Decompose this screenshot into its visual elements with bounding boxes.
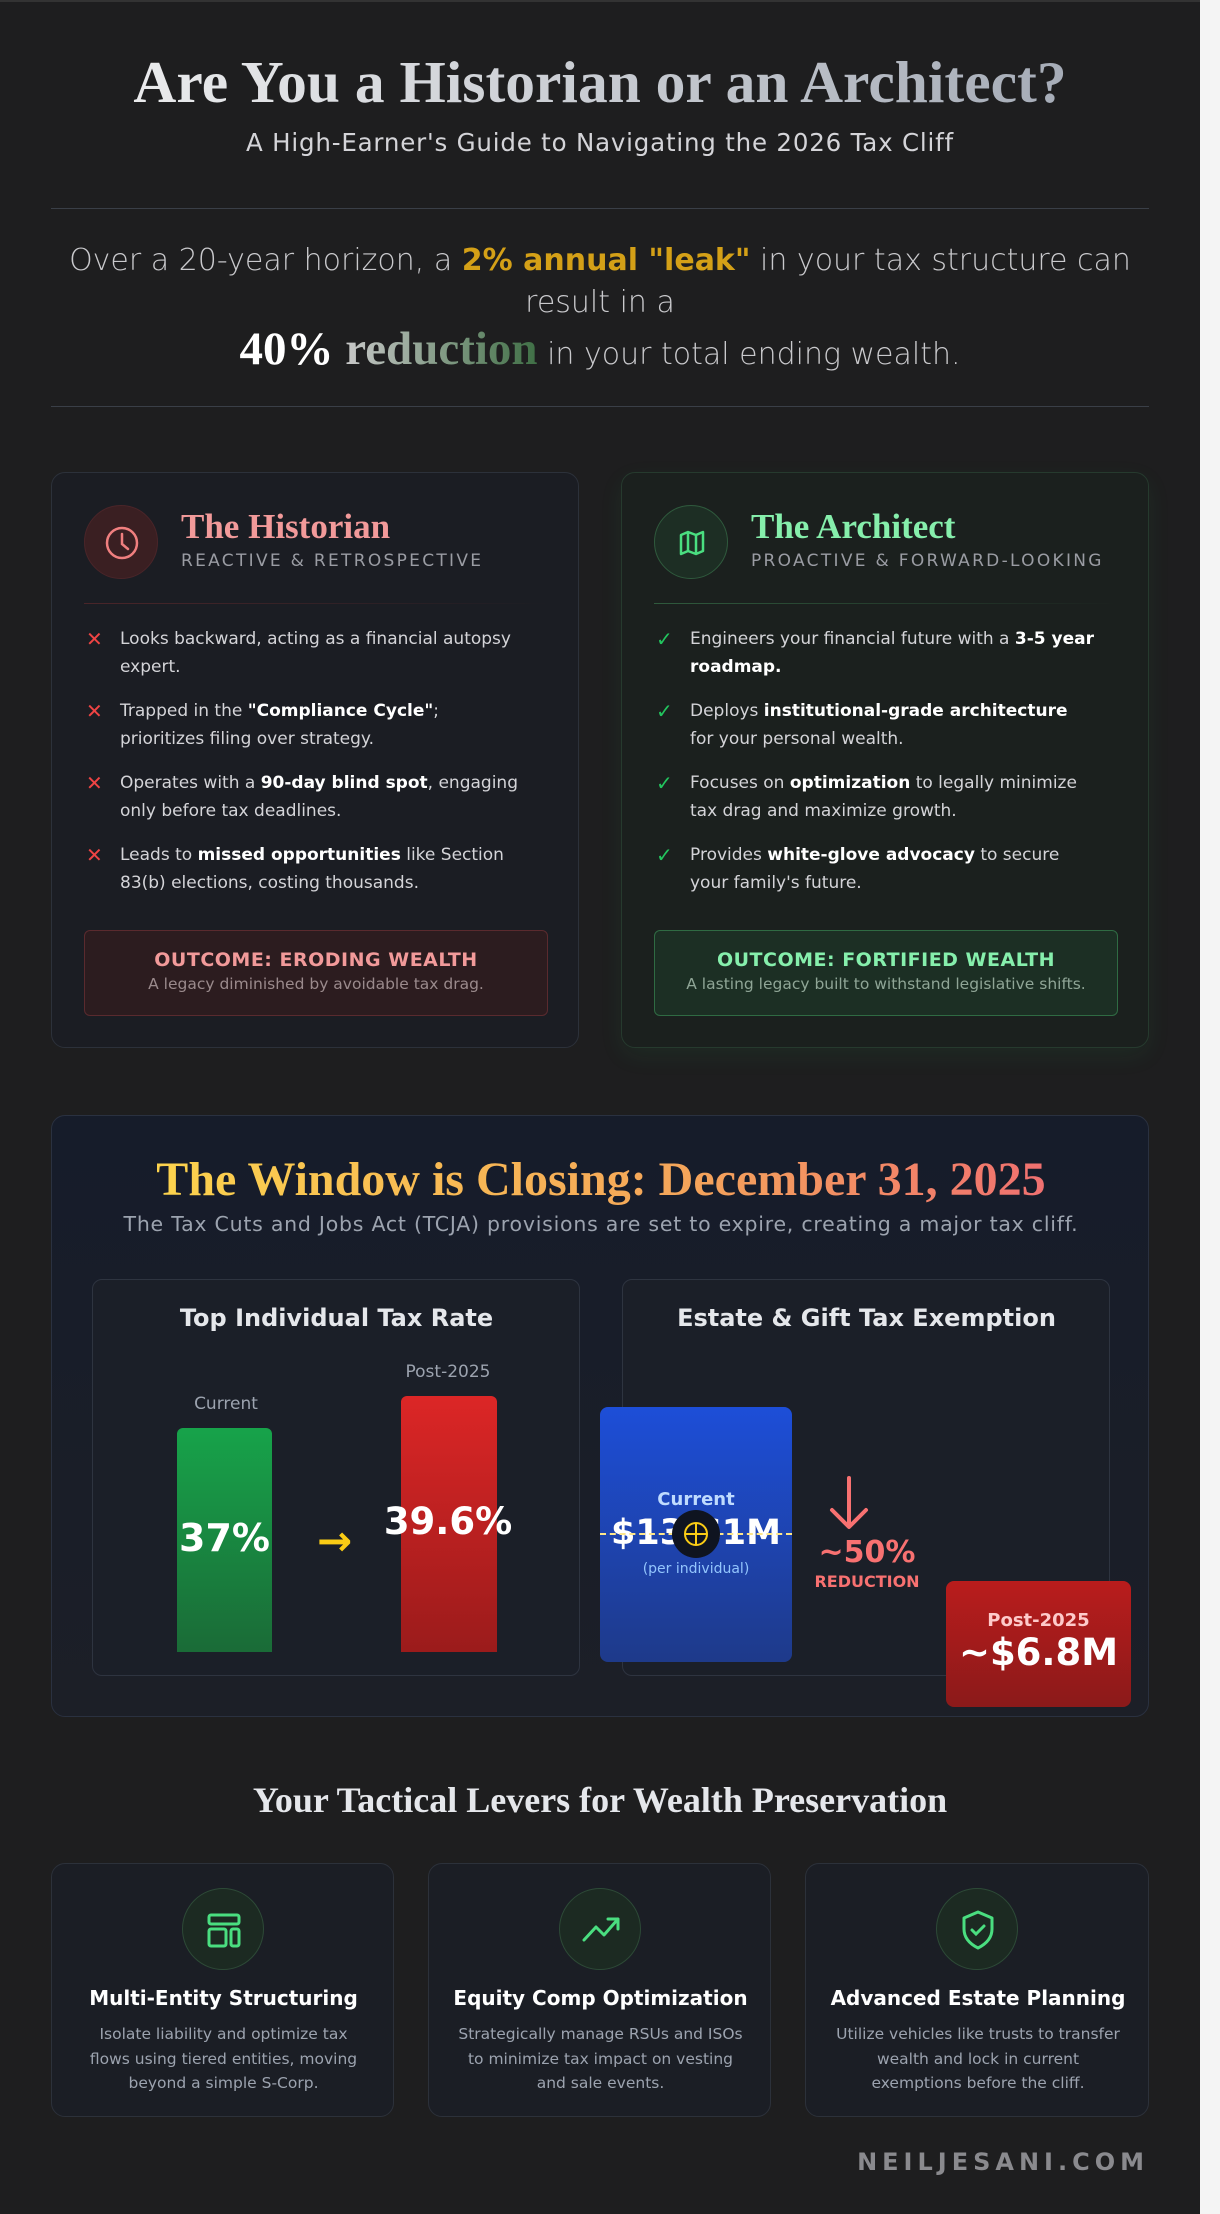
panel: architect — [621, 472, 1149, 1048]
list: historian traits: Looks backward, acting as a financial autopsy — [120, 629, 511, 649]
chart: top individual tax rate: 39.6% — [384, 1500, 512, 1543]
icon: shield — [936, 1888, 1018, 1970]
panel: historian: ✕ — [86, 627, 103, 651]
icon: map — [654, 505, 728, 579]
panel: equity comp optimization — [428, 1863, 771, 2117]
list: historian traits: expert. — [120, 657, 181, 677]
bar: current exemption: (per individual) — [643, 1561, 749, 1577]
list: architect traits: Deploys institutional-grade architecture — [690, 701, 1068, 721]
icon: trending up — [559, 1888, 641, 1970]
callout: eroding wealth: OUTCOME: ERODING WEALTH — [154, 949, 478, 971]
chart: estate & gift tax exemption: Estate & Gift Tax Exemption — [677, 1304, 1056, 1332]
chart: top individual tax rate: Top Individual Tax Rate — [180, 1304, 493, 1332]
heading: The Window is Closing: December 31, 2025 — [156, 1153, 1046, 1206]
bar: current exemption — [600, 1407, 792, 1662]
callout: eroding wealth — [84, 930, 548, 1016]
panel: advanced estate planning — [805, 1863, 1149, 2117]
list: historian traits: 83(b) elections, costing thousands. — [120, 873, 419, 893]
heading: tactical levers: Your Tactical Levers for Wealth Preservation — [253, 1780, 947, 1820]
list: historian traits: Leads to missed opportunities like Section — [120, 845, 504, 865]
bar: post-2025 exemption — [946, 1581, 1131, 1707]
panel: historian: ✕ — [86, 699, 103, 723]
list: historian traits: Trapped in the "Compliance Cycle"; — [120, 701, 439, 721]
panel: advanced estate planning: Utilize vehicles like trusts to transfer wealth and lock in current exemptions before the cliff. — [836, 2025, 1120, 2092]
list: historian traits: prioritizes filing over strategy. — [120, 729, 374, 749]
callout: fortified wealth: A lasting legacy built to withstand legislative shifts. — [686, 975, 1086, 993]
key stat statement: Over a 20-year horizon, a 2% annual "leak" in your tax structure can — [69, 243, 1131, 278]
chart: top individual tax rate: 37% — [179, 1516, 270, 1560]
arrow: reduction: ~50% — [819, 1535, 915, 1570]
panel: historian — [51, 472, 579, 1048]
panel: equity comp optimization: Strategically manage RSUs and ISOs to minimize tax impact on vesting and sale events. — [458, 2025, 743, 2092]
list: historian traits — [86, 627, 518, 893]
bar: post-2025 exemption: ~$6.8M — [959, 1631, 1118, 1674]
heading: PROACTIVE & FORWARD-LOOKING — [751, 551, 1104, 571]
heading: The Architect — [751, 507, 955, 546]
list: historian traits: Operates with a 90-day blind spot, engaging — [120, 773, 518, 793]
list: architect traits: Provides white-glove advocacy to secure — [690, 845, 1059, 865]
icon: clock — [84, 505, 158, 579]
callout: eroding wealth: A legacy diminished by avoidable tax drag. — [148, 975, 484, 993]
callout: fortified wealth: OUTCOME: FORTIFIED WEALTH — [717, 949, 1055, 971]
panel: equity comp optimization: Equity Comp Optimization — [453, 1986, 748, 2010]
bar: post-2025 exemption: Post-2025 — [987, 1610, 1090, 1631]
list: architect traits: tax drag and maximize growth. — [690, 801, 957, 821]
footer: brand: NEILJESANI.COM — [857, 2148, 1149, 2176]
chart: top individual tax rate: Current — [194, 1394, 258, 1414]
panel: architect: ✓ — [656, 627, 673, 651]
heading: The Historian — [181, 507, 390, 546]
list: architect traits: roadmap. — [690, 657, 782, 677]
arrow: reduction: REDUCTION — [814, 1572, 920, 1591]
heading — [751, 507, 1104, 571]
arrow: reduction — [814, 1476, 920, 1591]
heading: REACTIVE & RETROSPECTIVE — [181, 551, 483, 571]
chart: top individual tax rate: Post-2025 — [406, 1362, 490, 1382]
panel: historian: ✕ — [86, 771, 103, 795]
bar: current exemption: $13.61M — [611, 1513, 781, 1553]
list: historian traits: only before tax deadlines. — [120, 801, 341, 821]
panel: multi-entity structuring: Isolate liability and optimize tax flows using tiered entities, moving beyond a simple S-Corp. — [90, 2025, 357, 2092]
title: Are You a Historian or an Architect? — [133, 49, 1067, 115]
list: architect traits — [656, 627, 1094, 893]
panel: multi-entity structuring: Multi-Entity Structuring — [89, 1986, 358, 2010]
chart: top individual tax rate — [92, 1279, 580, 1676]
panel: historian: ✕ — [86, 843, 103, 867]
callout: fortified wealth — [654, 930, 1118, 1016]
panel: multi-entity structuring — [51, 1863, 394, 2117]
subheading: The Tax Cuts and Jobs Act (TCJA) provisions are set to expire, creating a major tax cliff. — [124, 1212, 1078, 1236]
icon: layout — [182, 1888, 264, 1970]
arrow: → — [317, 1516, 352, 1565]
list: architect traits: Focuses on optimization to legally minimize — [690, 773, 1077, 793]
key stat statement — [69, 243, 1131, 375]
panel: advanced estate planning: Advanced Estate Planning — [831, 1986, 1125, 2010]
chart: estate & gift tax exemption — [622, 1279, 1110, 1676]
key stat statement: result in a — [525, 285, 675, 320]
heading — [181, 507, 483, 571]
list: architect traits: for your personal wealth. — [690, 729, 904, 749]
key stat statement: 40% reduction in your total ending wealth. — [239, 323, 961, 375]
panel: window closing — [51, 1115, 1149, 1717]
list: architect traits: your family's future. — [690, 873, 862, 893]
subtitle: A High-Earner's Guide to Navigating the 2026 Tax Cliff — [246, 128, 954, 157]
panel: architect: ✓ — [656, 843, 673, 867]
panel: architect: ✓ — [656, 699, 673, 723]
panel: architect: ✓ — [656, 771, 673, 795]
list: architect traits: Engineers your financial future with a 3-5 year — [690, 629, 1094, 649]
bar: current exemption: Current — [657, 1489, 735, 1510]
